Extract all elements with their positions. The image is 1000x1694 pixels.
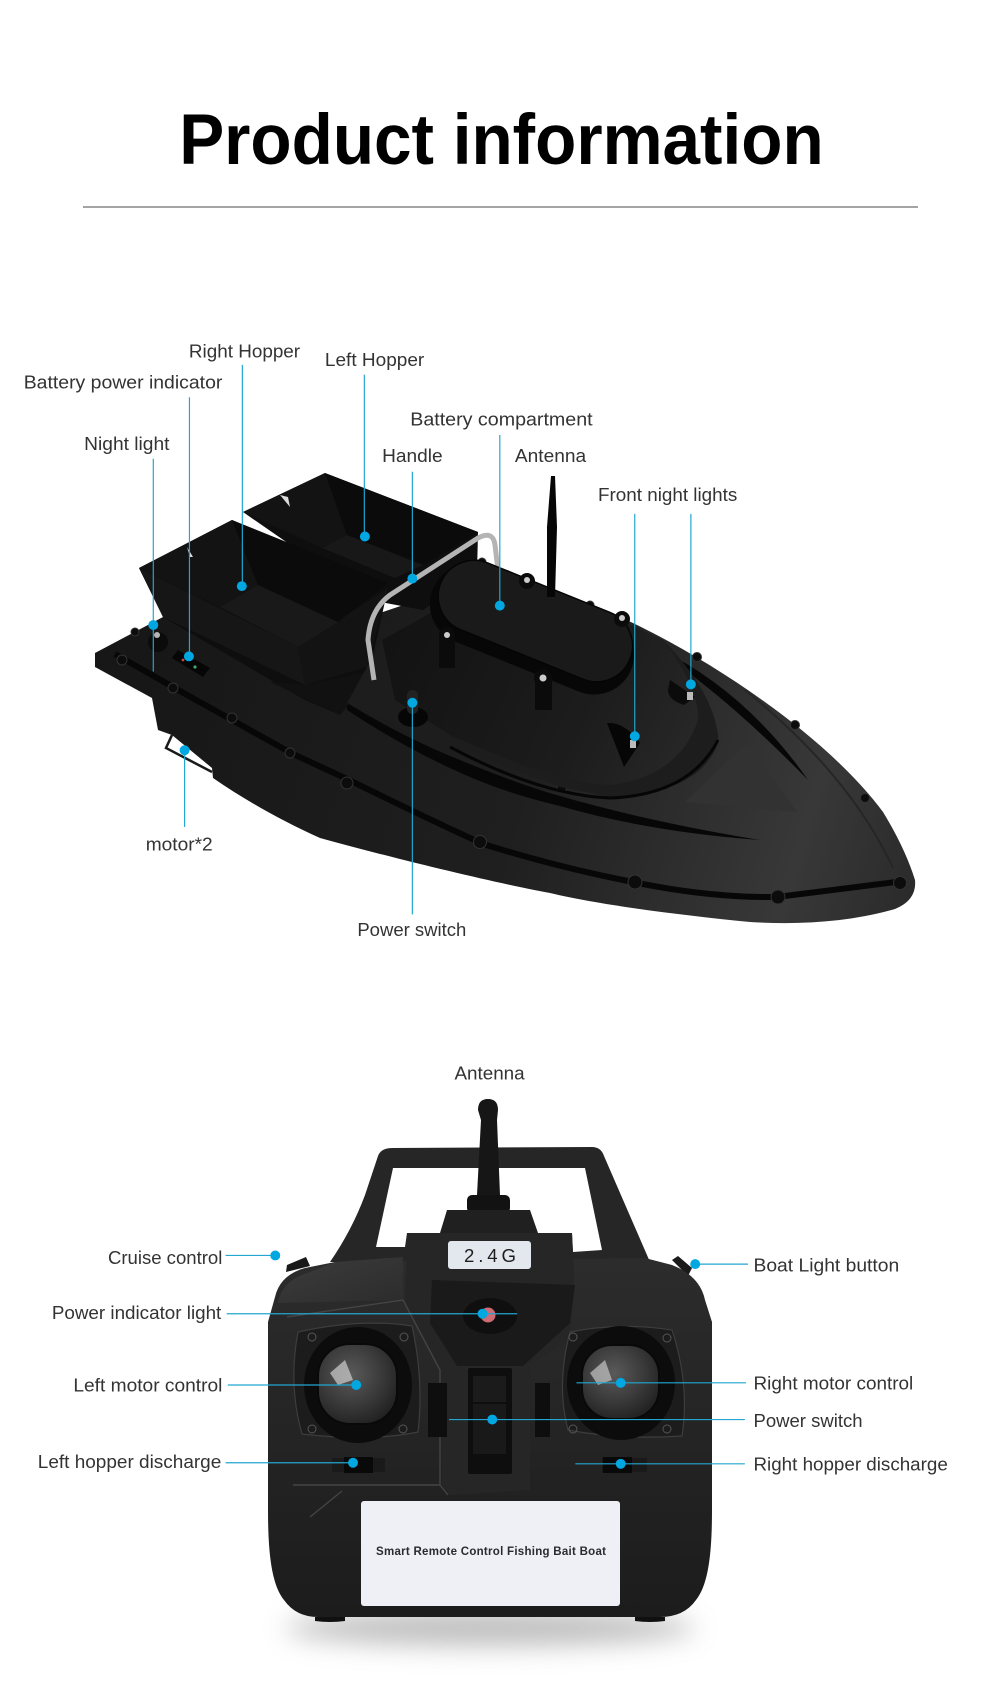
rear strip under hopper — [270, 672, 367, 715]
remote labels: Antenna — [454, 1063, 525, 1084]
remote callout lines and dots — [226, 1250, 748, 1469]
bow inner lip — [745, 690, 893, 868]
remote labels: Power indicator light — [52, 1303, 222, 1324]
boat callout lines and dots — [148, 365, 696, 914]
remote shadow — [285, 1610, 695, 1646]
remote labels: Left motor control — [73, 1375, 222, 1396]
left hopper — [243, 473, 478, 610]
boat labels: Power switch — [357, 920, 466, 941]
hull — [95, 570, 915, 923]
remote labels: Right motor control — [753, 1373, 913, 1394]
boat labels: Right Hopper — [189, 341, 300, 362]
carry handle — [330, 1147, 650, 1262]
boat labels: Front night lights — [598, 485, 737, 506]
deck rail — [115, 654, 896, 897]
boat illustration — [95, 473, 915, 923]
power switch knob — [398, 690, 428, 727]
inset facet — [430, 1280, 575, 1366]
right joystick — [562, 1326, 684, 1440]
boat labels: Antenna — [515, 446, 587, 467]
2.4G label — [448, 1241, 531, 1269]
boat antenna — [547, 476, 557, 597]
bow triangle facet — [685, 743, 797, 812]
product sticker — [361, 1501, 620, 1606]
right hopper — [139, 520, 388, 715]
product sticker: Smart Remote Control Fishing Bait Boat — [376, 1546, 606, 1558]
handle — [368, 535, 498, 680]
boat labels: Night light — [84, 434, 170, 455]
remote labels: Right hopper discharge — [753, 1454, 948, 1475]
remote labels — [38, 1064, 948, 1475]
power indicator light — [463, 1298, 517, 1334]
hopper switches — [332, 1457, 647, 1473]
remote labels: Power switch — [753, 1411, 863, 1432]
boat labels: Battery compartment — [410, 409, 593, 430]
left joystick — [294, 1323, 420, 1443]
feet — [315, 1617, 665, 1622]
boat labels: motor*2 — [146, 835, 213, 856]
boat labels: Left Hopper — [325, 350, 424, 371]
remote labels: Boat Light button — [753, 1256, 899, 1277]
night light and battery indicator — [148, 632, 210, 677]
remote controller — [268, 1099, 712, 1646]
2.4G label: 2.4G — [464, 1245, 516, 1266]
left shoulder highlight — [278, 1257, 403, 1303]
hull screws — [117, 558, 906, 904]
remote body — [268, 1258, 712, 1617]
remote labels: Cruise control — [108, 1248, 222, 1269]
battery hatch — [418, 548, 648, 707]
right side groove — [657, 648, 808, 780]
hull sweep groove — [347, 703, 760, 840]
boat labels: Handle — [382, 446, 443, 467]
centre panel — [405, 1233, 574, 1495]
side buttons — [286, 1256, 692, 1276]
hatch bolts — [439, 573, 630, 710]
motor bracket — [166, 735, 212, 772]
remote antenna — [467, 1099, 510, 1213]
panel bevel lines — [287, 1300, 448, 1517]
boat labels — [24, 341, 737, 941]
centre top neck — [440, 1210, 538, 1233]
cabin — [347, 570, 718, 798]
boat labels: Battery power indicator — [24, 373, 222, 394]
throttle wheel and trims — [428, 1368, 550, 1474]
title: Product information — [179, 101, 824, 180]
front night lights — [607, 680, 695, 767]
remote labels: Left hopper discharge — [38, 1452, 221, 1473]
